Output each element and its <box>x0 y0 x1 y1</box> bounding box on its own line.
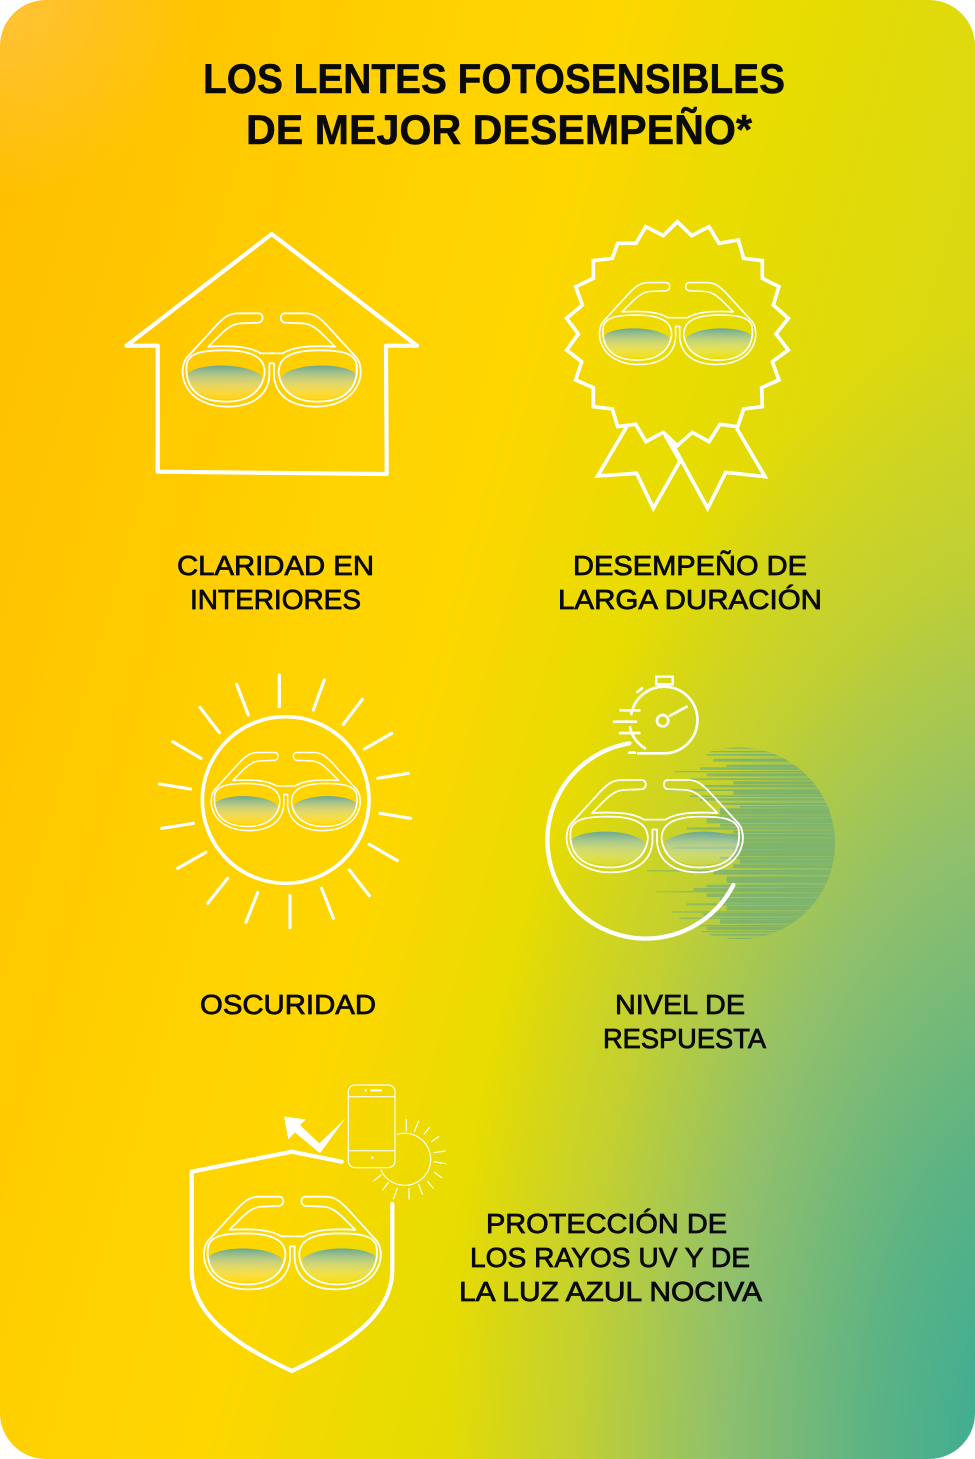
icon: sunglasses in shield <box>204 1197 381 1289</box>
panel: oscuridad <box>159 675 411 1020</box>
label: nivel de respuesta: NIVEL DE <box>615 989 745 1020</box>
icon: award rosette <box>567 222 788 508</box>
icon: shield <box>192 1152 392 1371</box>
label: desempeño de larga duración <box>558 550 822 615</box>
label: oscuridad: OSCURIDAD <box>200 989 376 1020</box>
panel: claridad en interiores <box>126 234 417 615</box>
icon: sunglasses in ring <box>567 780 743 872</box>
panel: desempeño de larga duración <box>558 222 822 615</box>
icon: check arrow, phone and small sun <box>284 1085 446 1199</box>
label: protección: LOS RAYOS UV Y DE <box>470 1242 750 1273</box>
label: claridad en interiores <box>177 550 374 615</box>
icon: sun <box>159 675 411 928</box>
title: LOS LENTES FOTOSENSIBLES <box>203 55 785 102</box>
label: protección: PROTECCIÓN DE <box>486 1208 727 1239</box>
icon: sunglasses in rosette <box>600 283 756 364</box>
label: claridad en interiores: INTERIORES <box>190 584 361 615</box>
title <box>203 55 785 153</box>
label: nivel de respuesta: RESPUESTA <box>603 1023 766 1054</box>
label: nivel de respuesta <box>603 989 766 1054</box>
label: protección: LA LUZ AZUL NOCIVA <box>459 1276 762 1307</box>
icon: house <box>126 234 417 474</box>
label: claridad en interiores: CLARIDAD EN <box>177 550 374 581</box>
icon: speed streaks <box>647 748 835 939</box>
title: DE MEJOR DESEMPEÑO* <box>246 106 753 153</box>
icon: sunglasses in house <box>183 313 361 407</box>
label: desempeño de larga duración: LARGA DURACIÓN <box>558 584 822 615</box>
panel: nivel de respuesta <box>545 676 835 1049</box>
label: protección <box>459 1208 762 1307</box>
icon: sunglasses in sun <box>211 753 360 831</box>
panel: protección <box>192 1085 762 1371</box>
icon: stopwatch and ring <box>547 677 733 939</box>
label: desempeño de larga duración: DESEMPEÑO DE <box>573 550 807 581</box>
